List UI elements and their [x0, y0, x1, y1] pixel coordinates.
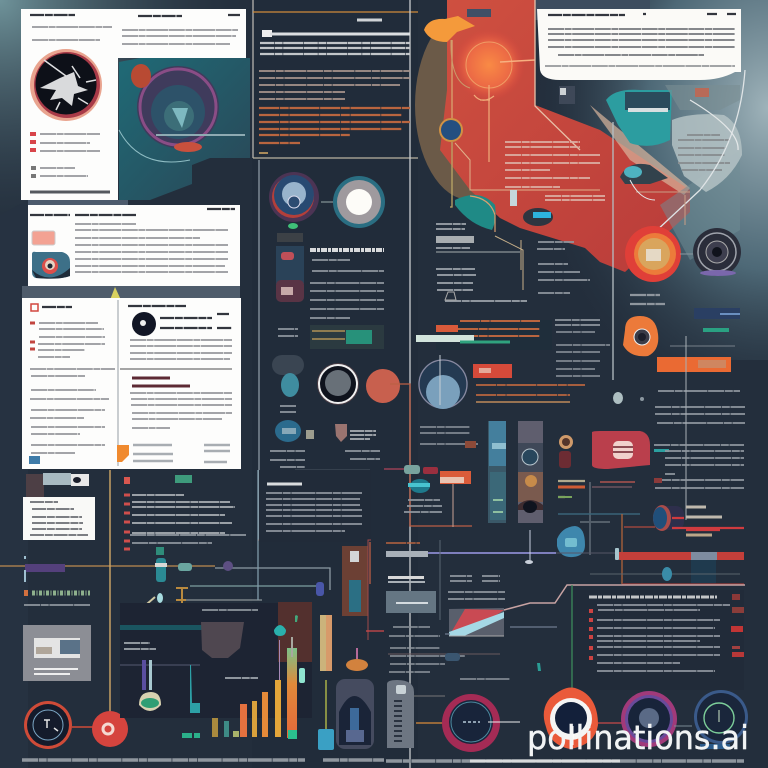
- panel: top right report: [537, 9, 741, 80]
- orange ring circle: [488, 687, 622, 749]
- icon: red drop circle: [72, 711, 128, 747]
- gradient connector: [386, 530, 556, 620]
- panel header: [30, 15, 240, 16]
- chart title: [202, 609, 258, 611]
- text: right list mid: [558, 445, 744, 555]
- icon: flask connector: [124, 547, 324, 610]
- orange petal: [424, 16, 475, 42]
- watermark: pollinations.ai: [527, 718, 749, 757]
- connector network: [155, 470, 330, 600]
- article title: [270, 32, 410, 36]
- gray button: [386, 591, 436, 613]
- striped orange chart legend: [416, 320, 600, 350]
- article text: [260, 43, 410, 54]
- text block: center right notes: [436, 224, 590, 301]
- headline: [30, 209, 235, 215]
- teal arch: [455, 195, 496, 230]
- red illustration backdrop: [415, 0, 740, 272]
- body: [310, 260, 384, 318]
- panel: lower right article: [572, 585, 744, 690]
- icon: orange lamp: [346, 540, 384, 671]
- panel: teal eye illustration: [119, 58, 250, 200]
- icon: orange eye: [623, 316, 658, 356]
- orange horizontal label text: [630, 295, 665, 304]
- panel: bar chart: [120, 602, 312, 739]
- strip above panel two: [28, 200, 128, 208]
- mini legend: [24, 590, 90, 605]
- icon: orange pin: [117, 445, 129, 462]
- icon: dark disc: [132, 312, 156, 336]
- tiny tag: [467, 9, 491, 17]
- icon: gray pill and teal drop: [272, 355, 304, 397]
- heart shape infographic: [655, 70, 745, 232]
- small thumbnail header: [26, 473, 89, 498]
- blue strip: [694, 308, 740, 319]
- icon: glass jar with figure: [336, 679, 374, 749]
- section: center stats: [276, 233, 384, 349]
- left list: [29, 323, 115, 464]
- heading: [310, 248, 384, 252]
- teal tag: [703, 328, 729, 332]
- header notes: [32, 27, 238, 44]
- icon: eye thumbnail: [32, 252, 70, 279]
- bars: [139, 615, 305, 739]
- gray remote device: [387, 680, 445, 748]
- icon: blue orb: [269, 172, 319, 229]
- card: remote device: [342, 546, 368, 616]
- text block: lower center captions: [388, 627, 541, 679]
- icon: silver ball: [317, 363, 359, 405]
- text: small body: [420, 427, 478, 444]
- blue pill icon: [557, 526, 585, 557]
- icon: dark funnel: [201, 622, 244, 658]
- text on red: [505, 142, 605, 200]
- left legend column: [276, 246, 304, 336]
- icon: pink chip: [32, 231, 55, 245]
- purple ring circle: [621, 691, 677, 747]
- orange bar: [657, 357, 731, 372]
- report text: [548, 29, 735, 55]
- card: gray column: [518, 421, 543, 523]
- panel: gray document thumbnail: [23, 625, 91, 681]
- icon: beige column: [318, 615, 334, 750]
- red illustration details: [424, 0, 672, 380]
- blue and red connector group: [558, 505, 744, 584]
- list: right column: [476, 332, 610, 402]
- icon: brown thumbnail: [559, 435, 573, 468]
- red banner bar: [553, 548, 744, 584]
- text block: lower center: [386, 576, 505, 613]
- center glass orb: [418, 355, 468, 409]
- icon: orange disc: [625, 180, 690, 282]
- orange highlight text: [259, 108, 410, 143]
- green bar: [310, 325, 384, 349]
- card: blue column: [488, 421, 506, 523]
- text block: center article: [259, 470, 371, 542]
- teal gauge circle: [674, 690, 748, 749]
- flask tag: [510, 190, 517, 206]
- red bullets: [589, 611, 593, 658]
- icon: white ring orb: [321, 176, 385, 228]
- area chart with line: [445, 585, 745, 636]
- dark mound: [620, 164, 668, 184]
- list: center top: [124, 475, 246, 549]
- dark pill: [523, 208, 553, 226]
- bullet list: [30, 134, 110, 192]
- chart caption: [124, 643, 258, 678]
- small machine: [559, 86, 575, 104]
- connector with orange frame: [390, 384, 472, 526]
- article title: [589, 596, 717, 598]
- panel heading: [31, 304, 186, 311]
- footer text: [22, 760, 744, 761]
- icon: starburst badge: [30, 49, 102, 121]
- panel: lower left report: [22, 298, 241, 469]
- vertical yellow connector: [109, 470, 111, 712]
- panel: small white note: [23, 497, 95, 540]
- gray strip with marker: [22, 286, 240, 306]
- panel: top-left report: [21, 9, 246, 200]
- glowing circle: [453, 29, 525, 101]
- report header: [548, 14, 736, 15]
- panel divider lines: [253, 0, 418, 768]
- section: dark article text: [259, 20, 410, 153]
- magenta ring circle: [442, 694, 500, 752]
- side tags: [731, 594, 744, 657]
- heading: [267, 482, 302, 486]
- panel: middle left report: [28, 205, 240, 286]
- article text: [597, 605, 730, 671]
- icon: outlined gauge circle: [24, 701, 72, 749]
- icon: device cluster: [384, 465, 471, 527]
- dark central column: [252, 0, 418, 768]
- text: right list top: [613, 391, 745, 423]
- icon: camera lens: [680, 228, 741, 276]
- blue node: [439, 118, 463, 142]
- red burger card: [592, 431, 650, 469]
- red label: [473, 364, 512, 378]
- teal shape: [606, 90, 672, 146]
- icon: coral ball: [366, 369, 400, 403]
- right text: [120, 314, 232, 462]
- horizontal connector: purple: [0, 556, 155, 582]
- body text: [75, 224, 228, 272]
- section: center small icons: [270, 406, 380, 470]
